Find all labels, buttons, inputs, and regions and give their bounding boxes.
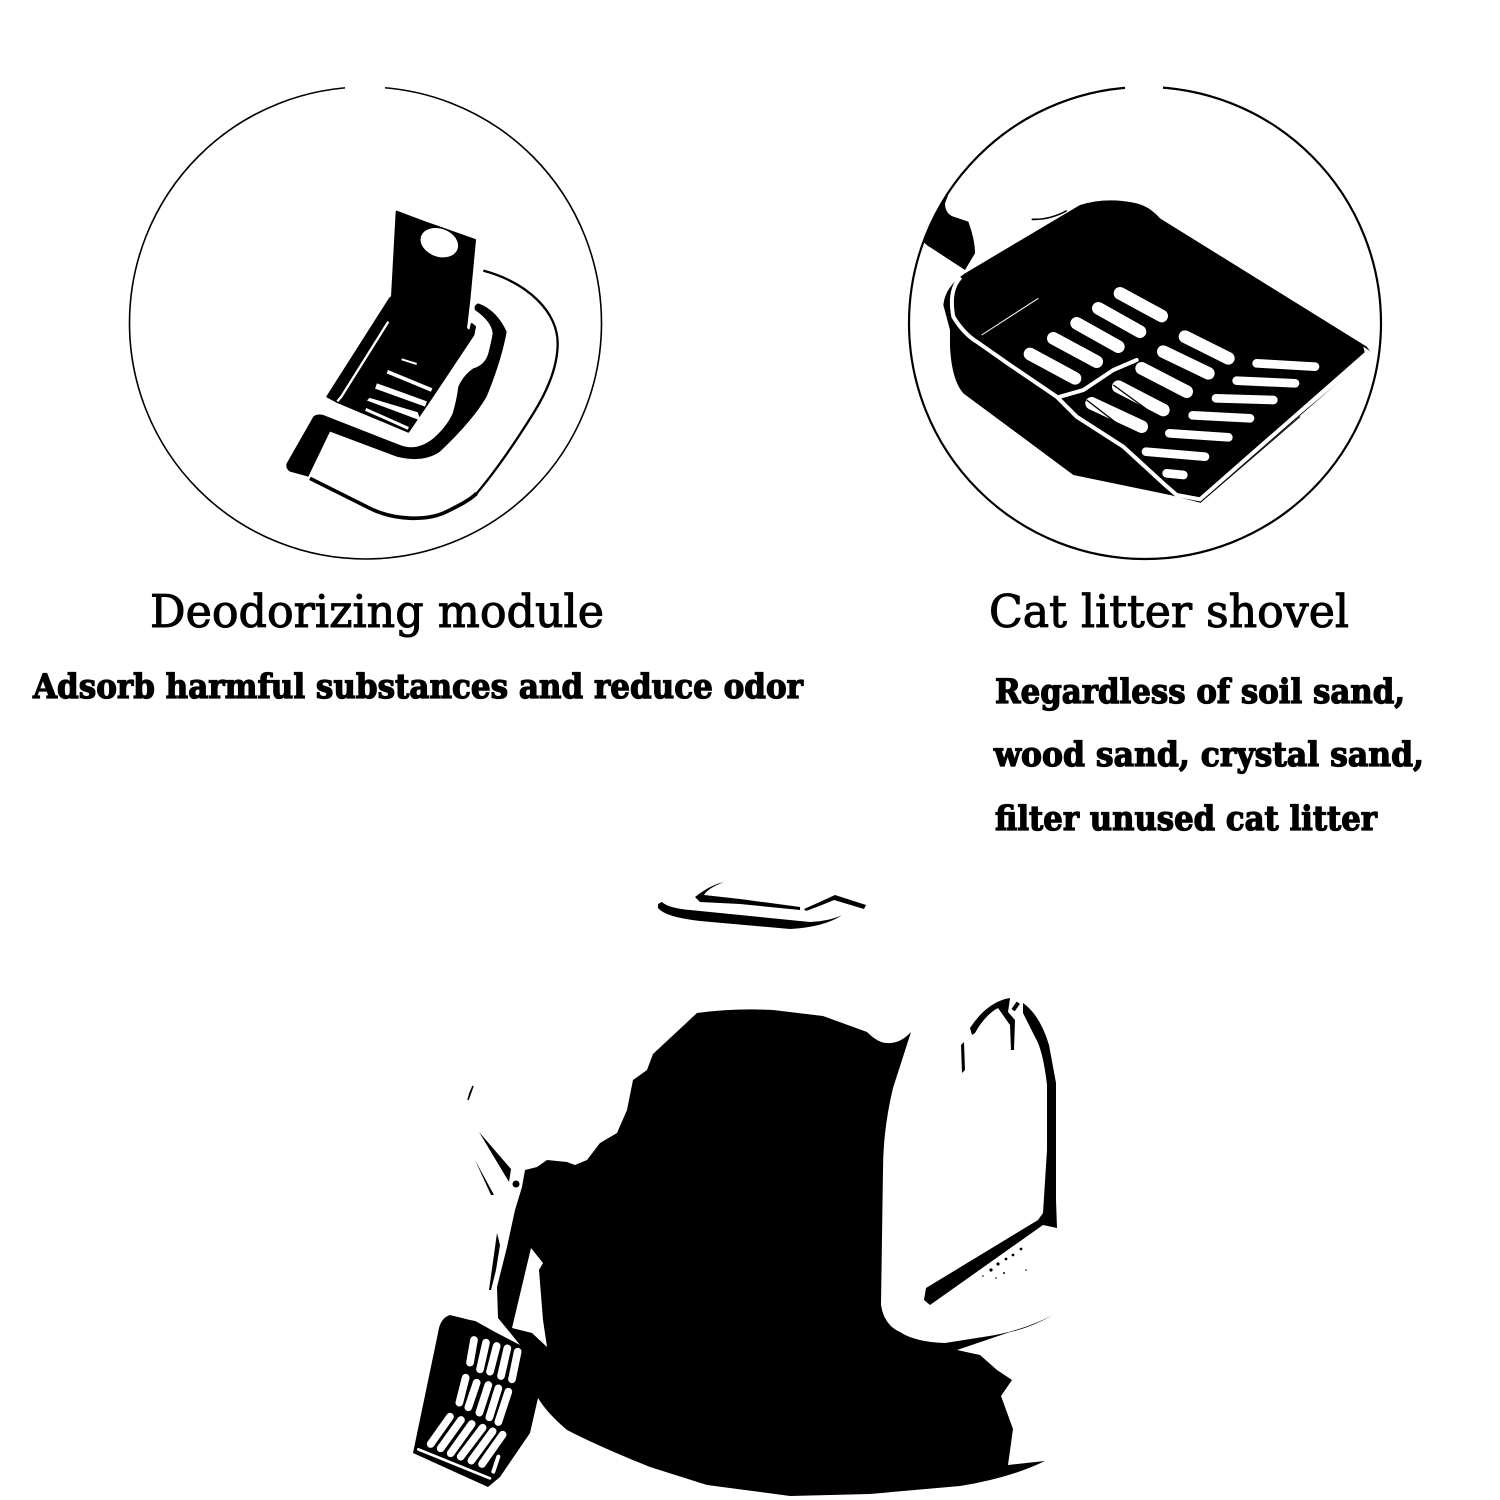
text: cat litter shovel description: filter unused cat litter — [995, 799, 1378, 839]
gap between scoop handle and box — [512, 1248, 547, 1347]
hood entrance details — [961, 998, 1020, 1073]
vent dots — [982, 1248, 1027, 1279]
illustration: covered litter box with scoop — [413, 882, 1057, 1496]
icon: litter shovel illustration — [923, 190, 1373, 503]
icon: deodorizing module illustration — [286, 212, 558, 518]
text: cat litter shovel description — [993, 672, 1424, 839]
heading: cat litter shovel: Cat litter shovel — [989, 585, 1349, 638]
circle frame: cat litter shovel — [909, 83, 1381, 559]
lid handle highlight lines — [658, 882, 866, 929]
circle frame: deodorizing module — [130, 83, 602, 559]
hood outline — [924, 1003, 1057, 1305]
text: deodorizing module description: Adsorb harmful substances and reduce odor — [32, 667, 804, 707]
panel: deodorizing module — [32, 83, 804, 707]
text: cat litter shovel description: Regardless of soil sand, — [995, 672, 1405, 712]
left edge accent lines — [468, 1086, 520, 1290]
heading: deodorizing module: Deodorizing module — [150, 585, 604, 638]
text: cat litter shovel description: wood sand, crystal sand, — [993, 735, 1424, 775]
scoop neck highlight — [470, 1270, 520, 1345]
panel: cat litter shovel — [909, 83, 1424, 839]
scoop slots — [418, 1340, 518, 1478]
litter box body — [413, 1009, 1053, 1496]
